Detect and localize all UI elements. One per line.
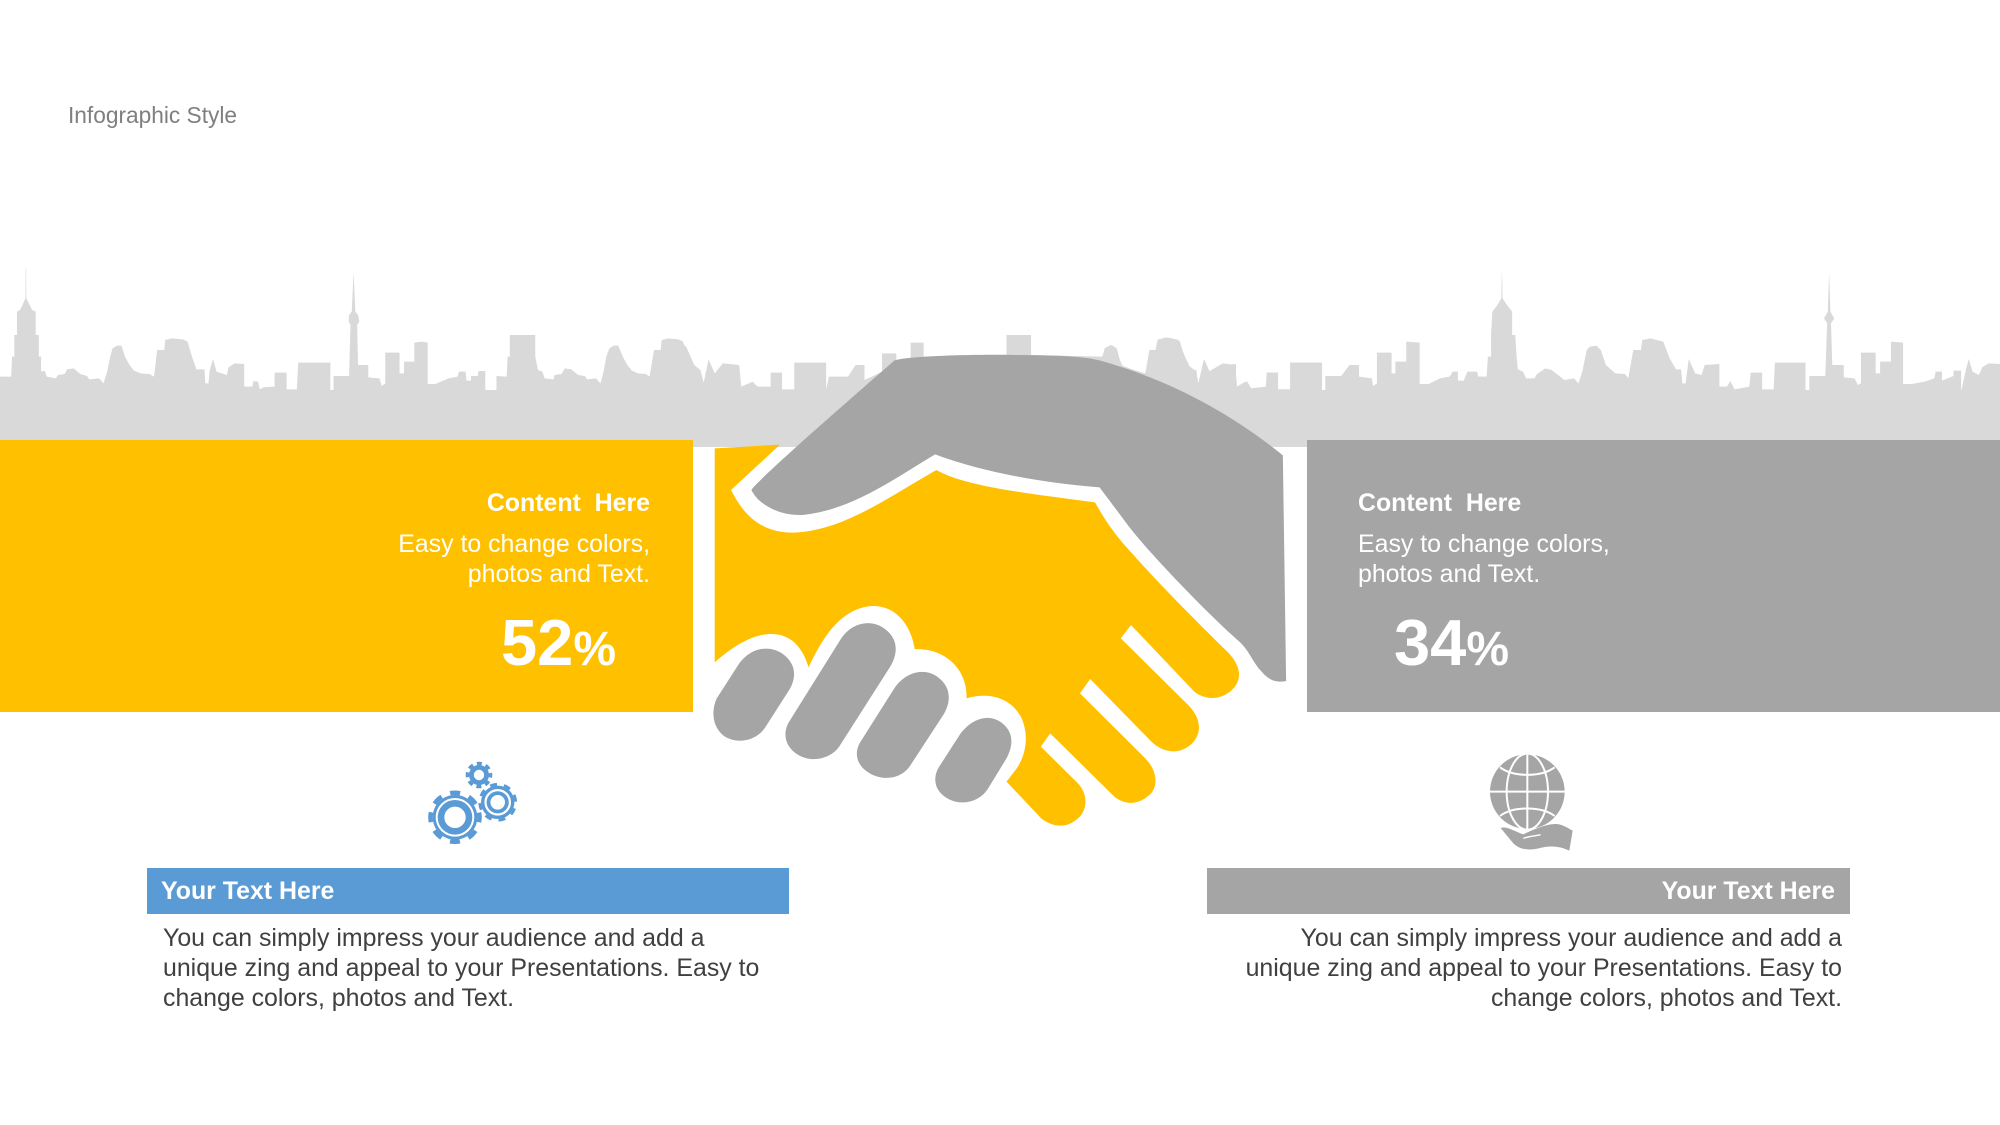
panel heading: content here: Content Here bbox=[1358, 489, 1521, 517]
panel text: photos and Text. bbox=[1358, 560, 1540, 588]
gray hand bbox=[751, 355, 1286, 682]
right body text: You can simply impress your audience and add a bbox=[1301, 924, 1842, 952]
left body text: unique zing and appeal to your Presentations. Easy to bbox=[163, 954, 759, 982]
gray fingers bbox=[713, 623, 1011, 802]
left body text bbox=[163, 924, 759, 1012]
left bar: your text here: Your Text Here bbox=[161, 877, 334, 905]
yellow hand bbox=[715, 445, 1239, 826]
panel: gray content bbox=[1307, 440, 2000, 712]
stat: 52%: 52% bbox=[501, 606, 616, 679]
right body text: unique zing and appeal to your Presentations. Easy to bbox=[1246, 954, 1842, 982]
panel text: photos and Text. bbox=[468, 560, 650, 588]
stat: 34%: 34% bbox=[1394, 606, 1509, 679]
panel: yellow content bbox=[0, 440, 693, 712]
right bar: your text here bbox=[1207, 868, 1850, 914]
panel text bbox=[398, 530, 650, 588]
left body text: You can simply impress your audience and add a bbox=[163, 924, 704, 952]
right bar: your text here: Your Text Here bbox=[1662, 877, 1835, 905]
right body text bbox=[1246, 924, 1842, 1012]
right body text: change colors, photos and Text. bbox=[1491, 984, 1842, 1012]
left bar: your text here bbox=[147, 868, 789, 914]
panel text: Easy to change colors, bbox=[1358, 530, 1610, 558]
title: Infographic Style bbox=[68, 102, 237, 128]
panel heading: content here: Content Here bbox=[487, 489, 650, 517]
left body text: change colors, photos and Text. bbox=[163, 984, 514, 1012]
panel text bbox=[1358, 530, 1610, 588]
panel text: Easy to change colors, bbox=[398, 530, 650, 558]
